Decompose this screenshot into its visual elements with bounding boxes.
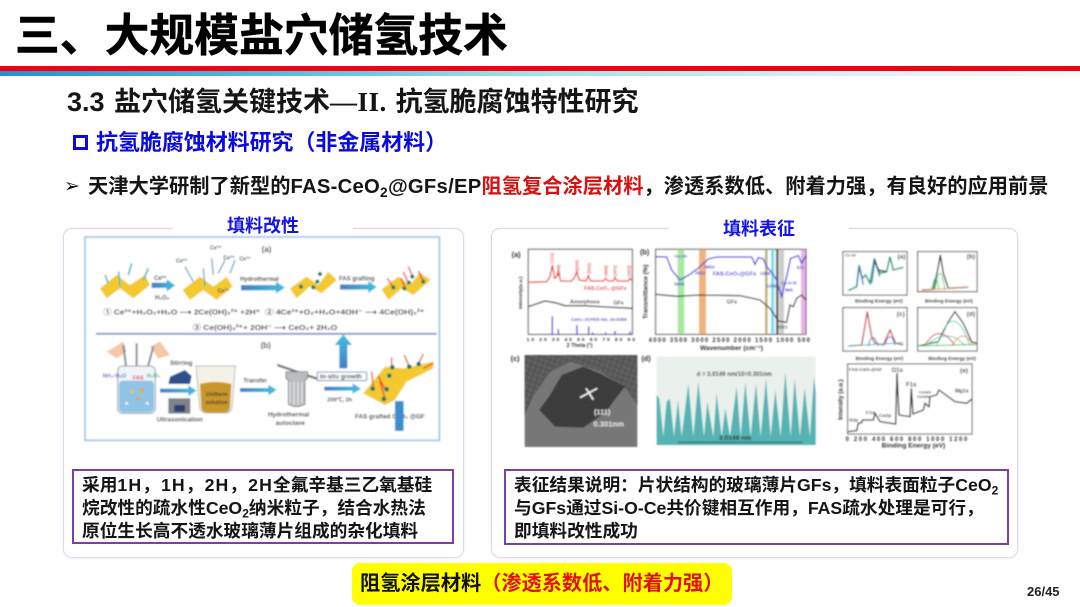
beaker: FAS	[133, 376, 144, 382]
chart: Si 2p: (d)	[967, 311, 975, 318]
equations: ② 4Ce³⁺+O₂+H₂O+4OH⁻ ⟶ 4Ce(OH)₂²⁺	[265, 308, 424, 317]
chart: XRD: (311)	[586, 263, 591, 274]
chart: FTIR: GFs	[727, 299, 737, 305]
vertical blue bar	[395, 401, 404, 431]
beaker uniform solution: Uniform	[206, 392, 228, 398]
sheet 2: Ce²⁺	[176, 259, 188, 265]
caption: filler characterization: 即填料改性成功	[514, 521, 638, 541]
beaker	[103, 342, 170, 413]
chart: Si 2p: Binding Energy (eV)	[928, 356, 976, 362]
image: TEM micrograph: (111)	[594, 407, 611, 416]
chart: FTIR: 965	[785, 288, 793, 293]
chart: FTIR: 4000 3500 3000 2500 2000 1500 1000 500	[649, 338, 811, 344]
chart: XPS survey: (e)	[960, 367, 968, 374]
arrow	[152, 279, 175, 291]
sheet 3	[290, 272, 337, 298]
label in-situ growth	[317, 372, 367, 381]
figure: filler modification schematic: Transfer	[243, 379, 268, 385]
sub heading text: 抗氢脆腐蚀材料研究（非金属材料）	[96, 130, 447, 155]
chart: FTIR: Ce-O-Si	[781, 280, 797, 285]
beaker uniform solution	[196, 366, 235, 413]
chart: F 1s: (b)	[967, 254, 975, 261]
equations	[103, 308, 424, 332]
sheet 2: Ce³⁺	[239, 257, 251, 263]
label in-situ growth: In-situ growth	[320, 374, 362, 381]
chart: FTIR: (b)	[640, 247, 650, 256]
icon: arrow bullet: ➢	[64, 176, 80, 197]
chart: XPS survey: O1s	[892, 368, 904, 374]
chart: Ce 3d: Ce 3d	[845, 253, 856, 258]
autoclave	[268, 365, 321, 427]
caption: filler modification	[72, 469, 454, 544]
chart: XPS survey: C1s	[866, 410, 875, 416]
equations: ① Ce³⁺+H₂O₂+H₂O ⟶ 2Ce(OH)₂²⁺ +2H⁺	[103, 308, 260, 317]
panel heading: filler modification: 填料改性	[227, 216, 299, 236]
stirrer	[157, 360, 203, 424]
conclusion banner	[352, 563, 732, 605]
chart: C 1s: (c)	[897, 311, 905, 318]
label b: (b)	[261, 341, 271, 350]
chart: XRD: 2 Theta (°)	[567, 343, 593, 349]
chart: lattice line profile: d = 3.0149 nm/10=0.301nm	[697, 372, 772, 378]
panel heading: filler characterization	[669, 216, 849, 242]
caption: filler characterization	[504, 469, 1009, 545]
chart: Ce 3d: Binding Energy (eV)	[855, 299, 903, 305]
figure: filler modification schematic	[85, 237, 439, 440]
chart: FTIR: 3405	[674, 282, 685, 287]
panel: filler characterization	[491, 228, 1018, 558]
chart: FTIR: Wavenumber (cm⁻¹)	[700, 345, 763, 352]
stirrer: Stirring	[170, 360, 193, 367]
sheet 2: Ce³⁺	[218, 288, 229, 294]
sheet 1	[100, 263, 150, 298]
caption: filler characterization: 与GFs通过Si-O-Ce共价键相互作用，FAS疏水处理是可行，	[514, 498, 984, 518]
caption: filler modification: 原位生长高不透水玻璃薄片组成的杂化填料	[82, 521, 418, 541]
chart: XRD: (111)	[550, 253, 555, 263]
chart: XPS survey: Binding Energy (eV)	[882, 442, 945, 449]
figure: XPS spectra	[838, 252, 977, 449]
title: 三、大规模盐穴储氢技术	[15, 11, 508, 61]
beaker uniform solution: solution	[206, 400, 228, 406]
caption: filler modification: 烷改性的疏水性CeO2纳米粒子，结合水热法	[82, 498, 426, 520]
chart: FTIR: Ge-OH	[675, 254, 687, 259]
panel heading: filler characterization: 填料表征	[723, 219, 795, 239]
figure: filler modification schematic: Ce³⁺	[154, 275, 167, 282]
chart: XRD: CeO₂-JCPDS No. 34-0394	[571, 317, 627, 322]
chart: FTIR: FAS-CeO₂@GFs	[713, 272, 756, 278]
chart: F 1s	[918, 252, 977, 305]
sheet 2: Ce³⁺	[210, 245, 222, 251]
figure: filler modification schematic: Hydrothermal	[240, 277, 279, 283]
label a: (a)	[262, 245, 272, 254]
chart: C 1s	[843, 308, 907, 362]
chart: XRD: (200)	[556, 264, 561, 276]
chart: lattice line profile	[641, 354, 816, 445]
sheet 2	[176, 245, 251, 300]
chart: XRD: (400)	[603, 265, 608, 276]
section heading: 3.3 盐穴储氢关键技术—II. 抗氢脆腐蚀特性研究	[67, 87, 639, 117]
chart: lattice line profile: 3.0149 nm	[719, 435, 751, 442]
chart: XPS survey: Intensity (a.u.)	[838, 379, 844, 420]
chart: XPS survey: 0 200 400 600 800 1000 1200	[846, 437, 968, 443]
figure: filler modification schematic: FAS grafting	[339, 277, 375, 283]
conclusion banner: 阻氢涂层材料（渗透系数低、附着力强）	[360, 573, 723, 595]
chart: FTIR: 1389	[760, 271, 771, 276]
divider	[96, 333, 437, 335]
caption: filler modification: 采用1H，1H，2H，2H全氟辛基三乙氧基硅	[82, 475, 432, 495]
sheet 4	[382, 267, 431, 300]
beaker: H₂O₂	[147, 373, 161, 379]
chart: XPS survey: Ce3d5	[917, 394, 930, 399]
chart: Ce 3d: (a)	[897, 254, 905, 261]
chart: Ce 3d	[843, 252, 907, 305]
chart: XPS survey: Si2p	[849, 417, 858, 422]
chart: XRD: (220)	[574, 260, 579, 271]
arrow	[340, 281, 377, 293]
arrow: up	[335, 334, 352, 368]
figure: filler modification schematic: H₂O₂	[155, 295, 170, 301]
chart: Si 2p	[918, 308, 977, 362]
arrow	[324, 383, 361, 394]
chart: FTIR: 2922	[695, 270, 706, 275]
summary text: 天津大学研制了新型的FAS-CeO2@GFs/EP阻氢复合涂层材料，渗透系数低、附着力强，有良好的应用前景	[88, 176, 1048, 200]
chart: XPS survey: F1s	[906, 382, 917, 388]
arrow	[241, 282, 285, 294]
sheet 2: Ce³⁺	[223, 255, 235, 261]
chart: XRD: GFs	[613, 301, 624, 307]
chart: XRD: 10 20 30 40 50 60 70 80 90	[527, 337, 635, 343]
chart: XPS survey: Ca2p	[879, 413, 891, 419]
chart: XPS survey: Ce3d3	[919, 389, 932, 394]
equations: ③ Ce(OH)₂²⁺+ 2OH⁻ ⟶ CeO₂+ 2H₂O	[193, 323, 337, 332]
chart: FTIR: 1245	[766, 284, 777, 289]
arrow	[240, 385, 277, 395]
autoclave: autoclave	[276, 420, 305, 427]
caption: filler characterization: 表征结果说明：片状结构的玻璃薄片GFs，填料表面粒子CeO2	[514, 475, 998, 497]
figure: XRD, FTIR, TEM and lattice profile	[511, 247, 816, 447]
chart: XRD: (331)	[613, 265, 618, 276]
chart: XRD: Intensity(a.u.)	[518, 276, 524, 309]
panel heading: filler modification	[173, 213, 353, 239]
chart: XRD: (a)	[512, 250, 521, 259]
beaker: NH₃·H₂O	[103, 373, 127, 379]
page number: 26/45	[1027, 584, 1060, 599]
sub heading	[73, 130, 447, 155]
product sheet	[355, 354, 433, 421]
chart: FTIR: 521	[797, 265, 805, 270]
product sheet: FAS grafted CeO₂ @GF	[355, 414, 425, 421]
image: TEM micrograph: (c)	[511, 354, 520, 363]
chart: XRD: (422)	[627, 265, 632, 276]
chart: FTIR: 1021	[777, 324, 788, 329]
chart: FTIR: 2854	[704, 264, 715, 269]
arrow	[160, 385, 197, 396]
chart: C 1s: Binding Energy (eV)	[856, 356, 904, 362]
chart: XRD: Amorphous	[570, 299, 600, 305]
image: TEM micrograph: 0.301nm	[593, 420, 624, 429]
chart: XPS survey: FAS-CeO₂@GF	[849, 367, 882, 372]
header rule	[0, 66, 1080, 76]
icon: hollow square bullet	[73, 135, 88, 150]
panel: filler modification	[63, 228, 464, 558]
image: TEM micrograph	[511, 354, 637, 447]
chart: XRD	[512, 249, 635, 349]
chart: XPS survey: Mg1s	[955, 389, 969, 395]
autoclave: Hydrothermal	[268, 412, 309, 419]
chart: F 1s: Binding Energy (eV)	[925, 299, 973, 305]
chart: XRD: FAS-CeO₂ @GFs	[584, 286, 627, 292]
chart: FTIR	[640, 247, 811, 352]
summary bullet	[64, 175, 1048, 200]
chart: FTIR: Transmittance (%)	[642, 264, 649, 319]
chart: XPS survey	[838, 364, 972, 449]
figure: filler modification schematic: 200℃, 2h	[327, 396, 353, 403]
chart: lattice line profile: (d)	[641, 354, 651, 363]
stirrer: Ultrasonication	[157, 417, 203, 424]
